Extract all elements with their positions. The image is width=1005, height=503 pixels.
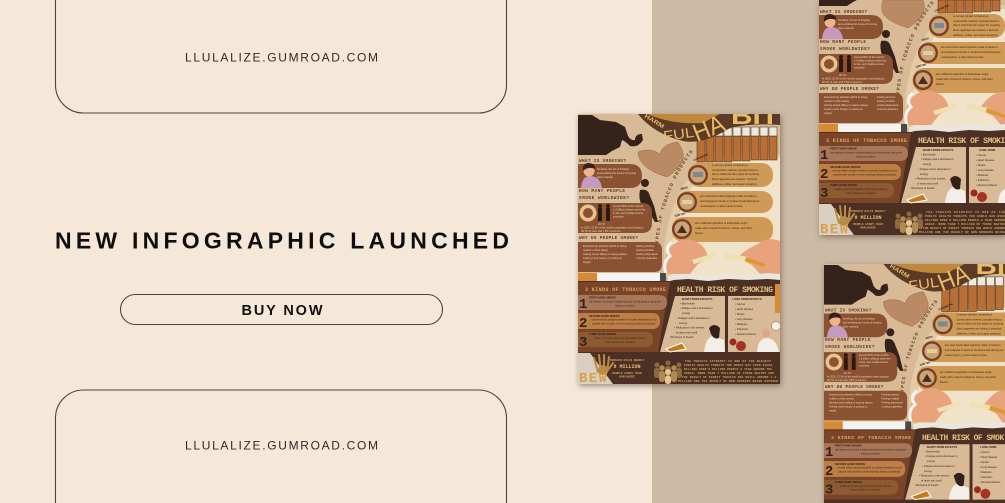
background band [652,0,1005,503]
panel: short-term effects: Shortness of breath [911,186,935,190]
callout: 8 million deaths: PEOPLE EVERY YEAR [612,372,642,375]
panel: short-term effects: of taste and smell [921,478,942,482]
smoker figure [639,179,658,222]
panel: short-term effects: • Fatigue and a decrease in [680,306,713,310]
panel: short-term effects: • Reduction in the senses [674,326,705,330]
what is smoking: plant material. [838,26,855,30]
poster: bottom right [822,262,1005,503]
how many people smoke: In 2020, 22.3% of the world's population used tobacco: [822,76,885,80]
panel: 3 kinds of tobacco smoke: tobacco product. [615,304,635,308]
hands breaking a cigarette [909,388,1005,422]
product card: bidis: and wrapped in tendu or tendumni leaf (Diospyros [941,50,1001,54]
callout: 8 million deaths: 8 MILLION [854,215,882,221]
what is smoking: and exhaling the fumes of burning [597,171,637,175]
panel: 3 kinds of tobacco smoke [819,133,911,203]
panel: short-term effects: • Bad breath [925,450,940,454]
how many people smoke: 36.7% [598,222,606,226]
panel: 3 kinds of tobacco smoke: smoke which people breathe in smoke breathed out by [837,465,902,469]
product card: bidis: melanoxylon), a plant native to Asia. [700,204,743,208]
why do people smoke: Feeling depressed. [877,103,899,107]
panel: 3 kinds of tobacco smoke: FIRST HAND SMOKE [835,444,862,448]
how many people smoke: Around 80% of the world's [613,204,644,208]
panel: 3 kinds of tobacco smoke: when tobacco is smoked. [851,488,881,492]
why do people smoke: weight. [824,111,832,115]
product card: bidis: BIDIS [925,334,933,340]
what is smoking: Smoking, the act of inhaling [838,18,870,22]
how many people smoke: Around 80% of the world's [854,55,885,59]
panel: 3 kinds of tobacco smoke: when tobacco is smoked. [846,191,876,195]
silhouette with pipe [578,115,643,155]
product card: bidis [677,185,773,213]
product card: cigarette: CIGARETTE [934,3,950,13]
panel: 3 kinds of tobacco smoke: 3 KINDS OF TOBACCO SMOKE [831,435,911,441]
why do people smoke: Feeling depressed. [636,252,658,256]
how many people smoke: SMOKE WORLDWIDE? [820,47,870,52]
panel: 3 kinds of tobacco smoke: 2 [579,316,587,332]
panel: long-term effects: LONG-TERM EFFECTS [732,297,762,301]
how many people smoke: 1.3 billion tobacco users live [854,58,887,62]
how many people smoke [824,338,897,382]
icon: crowd [895,212,923,235]
product card: bidis: and wrapped in tendu or tendumni leaf (Diospyros [945,348,1004,352]
product card: cigarette: a narrow cylinder containing a [712,163,748,167]
how many people smoke: 36.7% [844,371,852,375]
panel: long-term effects: LONG-TERM [979,148,996,152]
callout: 8 million deaths: 8 MILLION [613,364,641,370]
how many people smoke: in low- and middle-income [613,211,644,215]
panel: short-term effects: Shortness of breath [670,335,694,339]
why do people smoke: Experiencing attention deficit or being [583,244,627,248]
panel: 3 kinds of tobacco smoke: people who smoke or from burning tobacco products. [833,172,897,176]
why do people smoke: Feeling more hungry or putting on [829,405,868,409]
paragraph: tobacco epidemic: THE RESULT OF DIRECT TOBACCO USE WHILE AROUND 1.3 [682,376,776,379]
lower section [578,279,780,384]
panel: short-term effects: energy [920,172,929,176]
bottom link card [56,390,506,503]
product card: cigarette: combustible material, typically tobacco, [953,19,1000,23]
panel: long-term effects: • Dental problems [735,332,757,336]
paragraph: tobacco epidemic: THE TOBACCO EPIDEMIC IS ONE OF THE BIGGEST [685,360,771,363]
panel: 3 kinds of tobacco smoke: 3 [825,483,833,499]
panel: 3 kinds of tobacco smoke: SECOND HAND SMOKE [830,165,861,169]
title banner [883,253,1005,297]
why do people smoke: WHY DO PEOPLE SMOKE? [825,385,884,390]
panel: short-term effects: • Fatigue and a decrease in [921,157,954,161]
promo panel [54,0,509,503]
panel: long-term effects: • Lung disease [735,317,753,321]
paragraph: tobacco epidemic: WORLD. MORE THAN 7 MILLION OF THOSE DEATHS [925,223,1005,226]
panel: short-term effects: • Fatigue and a decrease in [922,464,955,468]
why do people smoke: unable to think clearly. [583,248,609,252]
panel: long-term effects: • Infections [979,475,993,479]
silhouette with pipe [819,0,857,6]
why do people smoke: Feeling more hungry or putting on [824,107,863,111]
product card: cigarette: additives, a filter, and paper wrapping. [712,182,758,186]
why do people smoke [824,385,907,420]
why do people smoke: Feeling anxious. [877,95,896,99]
panel: 3 kinds of tobacco smoke [578,282,670,352]
buy now button [120,294,442,324]
why do people smoke: Experiencing attention deficit or being [824,95,868,99]
panel: 3 kinds of tobacco smoke: 1 [825,445,833,461]
what is smoking [824,309,887,337]
panel: long-term effects: • Cancer [735,302,745,306]
panel: long-term effects: • Diabetes [735,322,748,326]
heading: NEW INFOGRAPHIC LAUNCHED [55,227,509,253]
why do people smoke: Feeling irritable. [636,248,655,252]
paragraph: tobacco epidemic: MILLION ARE THE RESULT OF NON-SMOKERS BEING EXPOSED [678,380,778,383]
how many people smoke: Around 80% of the world's [859,353,889,357]
panel: 3 kinds of tobacco smoke: THIRD HAND SMOKE [830,183,858,187]
panel: short-term effects: energy [682,311,691,315]
panel: short-term effects: SHORT-TERM EFFECTS [682,297,713,301]
how many people smoke: In 2020, 22.3% of the world's population used tobacco: [581,226,644,230]
panel: short-term effects: • Bad breath [921,152,936,156]
why do people smoke: Experiencing attention deficit or being [829,393,872,397]
why do people smoke: WHY DO PEOPLE SMOKE? [820,87,879,92]
cigarette row [697,127,777,162]
orange cigarette edge [775,284,780,313]
how many people smoke: countries. [613,214,625,218]
product card: cigarette: combustible material, typically tobacco, [957,317,1003,321]
panel: long-term effects: • Heart disease [976,158,995,162]
callout: 8 million deaths: WORLDWIDE [860,226,876,230]
paragraph: tobacco epidemic: THE RESULT OF DIRECT TOBACCO USE WHILE AROUND [923,227,1005,230]
panel: short-term effects: energy [927,459,936,463]
panel: 3 kinds of tobacco smoke: SECOND HAND SMOKE [589,314,620,318]
poster: top right [816,0,1005,240]
panel: 3 kinds of tobacco smoke: 3 [579,335,587,351]
paragraph: tobacco epidemic: PUBLIC HEALTH THREATS THE WORLD HAS EVER [925,215,1005,218]
panel: short-term effects: • Reduction in the senses [919,473,950,477]
product card: bidis: are used hand-rolled cigarette made of tobacco [945,343,1001,347]
product card: cigarette: that is rolled into thin paper for smoking. [957,321,1004,325]
tobacco leaf [638,142,683,177]
product card: cigarette: CIGARETTE [938,302,954,311]
panel: 3 kinds of tobacco smoke: made up of the pollutants that settle indoors [840,484,892,488]
panel: long-term effects: • Heart disease [979,455,998,459]
how many people smoke: in low- and middle-income [859,360,889,364]
how many people smoke: HOW MANY PEOPLE [579,189,625,194]
product card: kretek [913,62,1005,93]
how many people smoke: SMOKE WORLDWIDE? [579,196,629,201]
title banner: HARM [888,264,910,280]
product card: cigarette: Most cigarettes are tobacco, chemical [957,326,1002,330]
panel: 3 kinds of tobacco smoke: tobacco product. [856,154,876,158]
what is smoking: WHAT IS SMOKING? [825,309,872,314]
panel: short-term effects: • Fatigue and a decrease in [918,167,951,171]
product card: cigarette: Most cigarettes are tobacco, chemical [712,177,758,181]
why do people smoke: unable to think clearly. [829,397,855,401]
cigarette divider [824,421,1005,432]
how many people smoke: 1.3 billion tobacco users live [859,357,891,361]
why do people smoke: WHY DO PEOPLE SMOKE? [579,236,638,241]
what is smoking: plant material. [843,324,859,328]
what is smoking: and exhaling the fumes of burning [838,22,878,26]
cigarette divider [578,273,780,284]
callout: 8 million deaths: WORLDWIDE [619,376,635,378]
how many people smoke: 1.3 billion tobacco users live [613,208,646,212]
panel: short-term effects: energy [924,469,933,473]
panel: 3 kinds of tobacco smoke: FIRST HAND SMOKE [830,146,857,150]
product card: kretek: flavors. [936,82,945,86]
panel: short-term effects: • Fatigue and a decrease in [925,454,958,458]
panel: short-term effects: • Reduction in the senses [915,176,946,180]
why do people smoke: Feeling irritable. [877,99,896,103]
panel: 3 kinds of tobacco smoke: smoke which people breathe in smoke breathed out by [591,318,657,322]
hands breaking a cigarette [905,90,1005,125]
callout: 8 million deaths: PEOPLE EVERY YEAR [853,223,883,226]
paragraph: tobacco epidemic: PUBLIC HEALTH THREATS THE WORLD HAS EVER FACED, [684,364,774,367]
product card: bidis: melanoxylon), a plant native to Asia. [941,55,984,59]
panel: long-term effects: • Stroke [979,460,989,464]
panel: 3 kinds of tobacco smoke: 3 KINDS OF TOBACCO SMOKE [826,138,907,144]
curved heading: types of tobacco products: TYPES OF TOBACCO PRODUCTS [655,150,692,242]
panel: long-term effects [728,296,780,352]
panel: short-term effects: • Bad breath [680,302,695,306]
why do people smoke [578,236,662,272]
panel: 3 kinds of tobacco smoke: 1 [579,297,587,313]
why do people smoke: Having issues falling or staying asleep. [824,103,869,107]
how many people smoke: SMOKE WORLDWIDE? [825,345,875,350]
top link card [56,0,506,113]
what is smoking: and exhaling the fumes of burning [843,320,882,324]
how many people smoke [819,40,893,84]
product card: bidis: and wrapped in tendu or tendumni leaf (Diospyros [700,199,760,203]
callout: 8 million deaths [578,353,645,387]
panel: long-term effects: • Stroke [976,163,986,167]
paragraph: tobacco epidemic: WORLD. MORE THAN 7 MILLION OF THOSE DEATHS ARE [684,372,774,375]
tobacco leaf [882,0,924,28]
why do people smoke: Feeling irritable. [881,397,900,401]
tobacco leaf [883,292,928,326]
panel: 3 kinds of tobacco smoke: 1 [820,148,828,164]
product card: cigarette: that is rolled into thin paper for smoking. [712,172,760,176]
how many people smoke: 36.7% of men and 7.8% of women. [827,378,867,382]
panel: 3 kinds of tobacco smoke: the stream of smoke inhaled directly by the person using the [589,300,661,304]
panel: 3 kinds of tobacco smoke: THIRD HAND SMOKE [589,332,617,336]
title banner [638,102,780,148]
what is smoking: Smoking, the act of inhaling [843,316,875,320]
what is smoking: plant material. [597,175,614,179]
product card: bidis [918,36,1005,64]
panel: long-term effects [973,444,1005,500]
why do people smoke: Craving cigarettes. [636,256,658,260]
product card: kretek: flavors. [695,231,704,235]
panel: short-term effects [660,296,725,352]
panel: long-term effects: • Infections [735,327,749,331]
panel: long-term effects [969,147,1005,203]
why do people smoke: Feeling anxious. [881,393,900,397]
panel: short-term effects: energy [679,321,688,325]
smoker figure [880,30,899,73]
paragraph: tobacco epidemic: KILLING OVER 8 MILLION PEOPLE A YEAR AROUND [925,219,1005,222]
cigarette row [942,277,1003,312]
product card: cigarette [929,3,1005,38]
silhouette with pipe [824,265,888,305]
why do people smoke: weight. [583,260,591,264]
smoker figure [885,328,903,371]
how many people smoke: 36.7% of men and 7.8% of women. [822,80,863,84]
panel: 3 kinds of tobacco smoke: 3 [820,186,828,202]
panel: 3 kinds of tobacco smoke: SECOND HAND SMOKE [835,462,865,466]
panel: 3 kinds of tobacco smoke [824,430,915,500]
what is smoking [819,10,883,39]
product card: kretek [917,360,1005,391]
product card: kretek: made with a blend of tobacco, cloves, and other [695,226,752,230]
callout: 8 million deaths: TOBACCO KILLS NEARLY [610,359,645,362]
product card: cigarette [688,152,773,187]
product card: bidis [922,334,1005,362]
panel: 3 kinds of tobacco smoke: THIRD HAND SMOKE [835,480,862,484]
how many people smoke: HOW MANY PEOPLE [820,40,866,45]
callout: 8 million deaths: TOBACCO KILLS NEARLY [851,210,886,213]
panel: 3 kinds of tobacco smoke: when tobacco is smoked. [605,340,635,344]
why do people smoke [819,87,903,123]
title banner: FUL [907,274,940,294]
heading: health risk of smoking: HEALTH RISK OF SMOKING [677,286,773,295]
callout: 8 million deaths [819,204,886,238]
how many people smoke: In 2020, 22.3% of the world's population used tobacco: [827,374,889,378]
paragraph: tobacco epidemic: MILLION ARE THE RESULT OF NON-SMOKERS BEING [919,231,1005,234]
product card: kretek: KRETEK [674,211,686,218]
product card: bidis: BIDIS [921,36,929,42]
product card: cigarette: that is rolled into thin paper for smoking. [953,23,1001,27]
panel: 3 kinds of tobacco smoke: people who smoke or from burning tobacco products. [838,469,901,473]
product card: bidis: BIDIS [680,185,688,191]
panel: 3 kinds of tobacco smoke: made up of the pollutants that settle indoors [835,187,888,191]
cigarette row [938,0,1000,13]
heading: health risk of smoking: HEALTH RISK OF SMOK [922,434,1004,443]
product card: kretek: KRETEK [919,360,931,367]
panel: long-term effects: • Dental problems [979,480,1001,484]
bottom link card: LLULALIZE.GUMROAD.COM [185,438,378,452]
top link card: LLULALIZE.GUMROAD.COM [185,50,378,64]
panel: long-term effects: • Diabetes [976,173,989,177]
title banner: FUL [662,124,695,144]
product card: kretek: are unfiltered cigarettes of Indonesian origin, [940,370,993,374]
product card: cigarette [932,302,1005,336]
product card: cigarette: a narrow cylinder containing a [953,14,989,18]
product card: cigarette: combustible material, typically tobacco, [712,168,759,172]
title banner: HARM [643,114,665,130]
panel: long-term effects: • Dental problems [976,183,998,187]
panel: short-term effects [905,444,970,500]
product card: kretek: made with a blend of tobacco, cloves, and other [940,375,996,379]
panel: 3 kinds of tobacco smoke: people who smoke or from burning tobacco products. [592,322,656,326]
curved heading: types of tobacco products: TYPES OF TOBACCO PRODUCTS [900,300,938,392]
product card: kretek: flavors. [940,380,949,384]
panel: short-term effects: energy [923,162,932,166]
how many people smoke: in low- and middle-income [854,62,885,66]
panel: 3 kinds of tobacco smoke: made up of the pollutants that settle indoors [594,336,647,340]
why do people smoke: Having issues falling or staying asleep. [583,252,628,256]
panel: short-term effects: • Fatigue and a decrease in [677,316,710,320]
product card: kretek: are unfiltered cigarettes of Indonesian origin, [695,221,748,225]
product card: cigarette: additives, a filter, and paper wrapping. [953,33,999,37]
why do people smoke: Feeling anxious. [636,244,655,248]
product card: bidis: are used hand-rolled cigarette made of tobacco [941,45,998,49]
panel: 3 kinds of tobacco smoke: 2 [825,464,833,480]
panel: short-term effects: of taste and smell [917,182,938,186]
lower section [819,130,1005,235]
panel: long-term effects: • Lung disease [979,465,997,469]
panel: short-term effects: of taste and smell [676,330,697,334]
panel: 3 kinds of tobacco smoke: tobacco product. [861,452,881,456]
poster: center [575,112,784,390]
what is smoking [578,159,642,188]
paragraph: tobacco epidemic [919,211,1005,234]
panel: 3 kinds of tobacco smoke: smoke which people breathe in smoke breathed out by [832,168,898,172]
paragraph: tobacco epidemic [678,360,778,383]
cigarette divider [819,124,1005,135]
product card: kretek: are unfiltered cigarettes of Indonesian origin, [936,72,989,76]
panel: 3 kinds of tobacco smoke: 3 KINDS OF TOBACCO SMOKE [585,287,666,293]
panel: long-term effects: • Lung disease [976,168,994,172]
panel: long-term effects: • Cancer [979,450,990,454]
product card: cigarette: additives, a filter, and paper wrapping. [957,331,1002,335]
product card: kretek: KRETEK [915,62,927,69]
why do people smoke: weight. [829,409,837,413]
icon: crowd [654,360,682,384]
panel: short-term effects: SHORT-TERM EFFECTS [923,148,954,152]
panel: short-term effects: SHORT-TERM EFFECTS [927,445,957,449]
how many people smoke [578,189,652,233]
panel: long-term effects: LONG-TERM [980,445,997,449]
product card: cigarette: a narrow cylinder containing a [957,312,992,316]
paragraph: tobacco epidemic: THE TOBACCO EPIDEMIC IS ONE OF THE [926,211,1005,214]
panel: long-term effects: • Infections [976,178,990,182]
panel: 3 kinds of tobacco smoke: the stream of smoke inhaled directly by the person using the [830,150,902,154]
curved heading: types of tobacco products: TYPES OF TOBACCO PRODUCTS [896,1,934,94]
panel: short-term effects [901,147,966,203]
what is smoking: WHAT IS SMOKING? [820,10,867,15]
panel: long-term effects: • Heart disease [735,307,754,311]
why do people smoke: Feeling depressed. [881,401,904,405]
panel: 3 kinds of tobacco smoke: the stream of smoke inhaled directly by the person using the [835,448,906,452]
lower section [824,427,1005,503]
panel: 3 kinds of tobacco smoke: 2 [820,167,828,183]
hands breaking a cigarette [664,239,780,274]
product card: bidis: melanoxylon), a plant native to Asia. [945,353,988,357]
buy now button: BUY NOW [242,303,323,319]
panel: short-term effects: Shortness of breath [915,483,939,487]
how many people smoke: 36.7% of men and 7.8% of women. [581,229,622,233]
how many people smoke: countries. [859,363,870,367]
product card: cigarette: Most cigarettes are tobacco, chemical [953,28,999,32]
why do people smoke: Craving cigarettes. [881,405,903,409]
what is smoking: WHAT IS SMOKING? [579,159,626,164]
panel: long-term effects: • Diabetes [979,470,992,474]
panel: long-term effects: • Cancer [976,153,986,157]
why do people smoke: unable to think clearly. [824,99,850,103]
product card: cigarette: CIGARETTE [693,152,709,162]
how many people smoke: countries. [854,66,866,70]
how many people smoke: HOW MANY PEOPLE [825,338,871,343]
product card: bidis: are used hand-rolled cigarette made of tobacco [700,194,757,198]
why do people smoke: Feeling more hungry or putting on [583,256,622,260]
why do people smoke: Craving cigarettes. [877,107,899,111]
paragraph: tobacco epidemic: KILLING OVER 8 MILLION PEOPLE A YEAR AROUND THE [684,368,772,371]
product card: kretek: made with a blend of tobacco, cloves, and other [936,77,993,81]
what is smoking: Smoking, the act of inhaling [597,167,629,171]
why do people smoke: Having issues falling or staying asleep. [829,401,873,405]
product card: kretek [672,211,773,242]
panel: long-term effects: • Stroke [735,312,745,316]
how many people smoke: 36.7% [839,73,847,77]
panel: 3 kinds of tobacco smoke: FIRST HAND SMOKE [589,296,616,300]
